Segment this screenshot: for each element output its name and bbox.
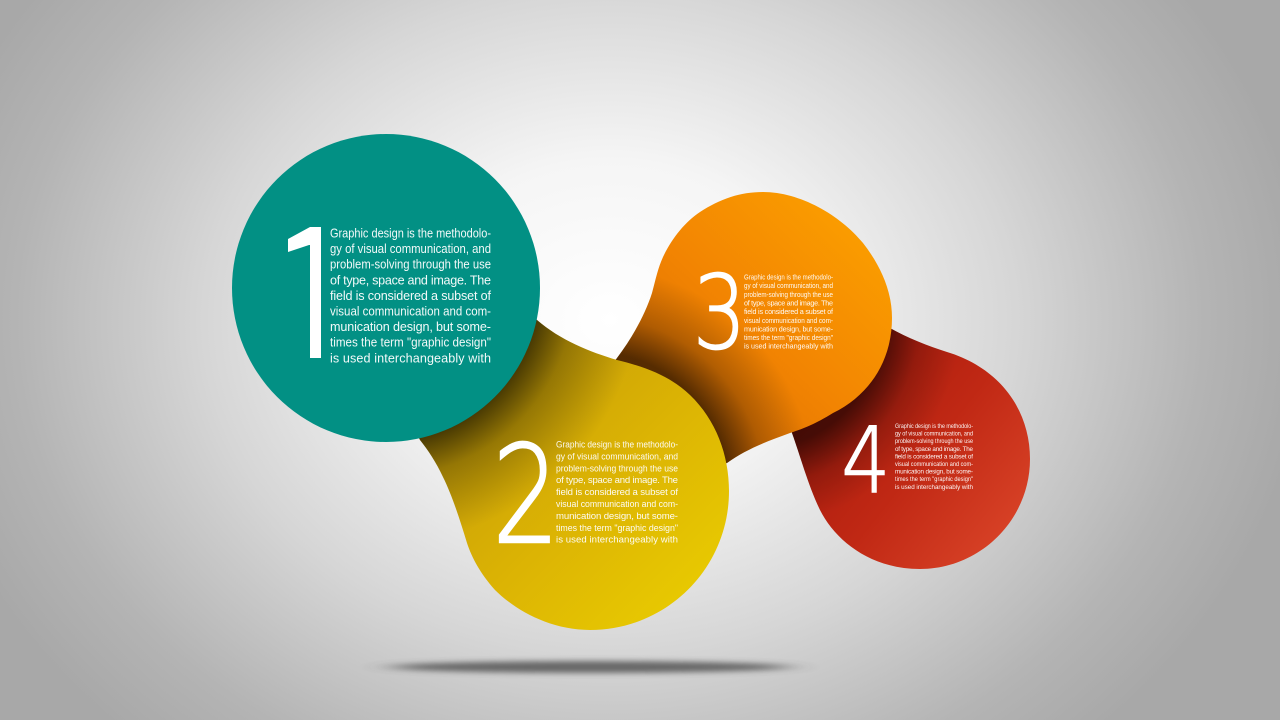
text block 1 (330, 226, 492, 365)
text block 3: Graphic design is the methodolo- (744, 272, 834, 282)
text block 4: gy of visual communication, and (895, 431, 973, 438)
text block 3: is used interchangeably with (744, 342, 833, 351)
text block 4 (895, 423, 973, 491)
panel: step 2 yellow (400, 300, 729, 630)
text block 2: munication design, but some- (556, 511, 678, 522)
text block 3: visual communication and com- (744, 316, 834, 325)
panel: step 4 red (780, 322, 1030, 569)
text block 4: visual communication and com- (895, 461, 973, 468)
number 3: 3 (693, 253, 746, 372)
text block 4: times the term "graphic design" (895, 476, 973, 483)
text block 2: of type, space and image. The (556, 475, 678, 486)
text block 1: is used interchangeably with (330, 351, 491, 365)
text block 3: problem-solving through the use (744, 290, 833, 299)
text block 1: gy of visual communication, and (330, 242, 491, 256)
text block 4: field is considered a subset of (895, 453, 973, 460)
text block 2: Graphic design is the methodolo- (556, 440, 678, 450)
text block 2: problem-solving through the use (556, 463, 678, 474)
text block 3: times the term "graphic design" (744, 333, 833, 342)
text block 3: of type, space and image. The (744, 298, 833, 308)
text block 1: munication design, but some- (330, 320, 491, 334)
text block 2: gy of visual communication, and (556, 451, 678, 462)
text block 4: problem-solving through the use (895, 438, 973, 445)
text block 1: visual communication and com- (330, 304, 491, 318)
floor shadow (390, 661, 790, 673)
number 2: 2 (492, 417, 559, 574)
text block 3: munication design, but some- (744, 324, 834, 333)
text block 2: field is considered a subset of (556, 487, 678, 498)
text block 1: times the term "graphic design" (330, 336, 491, 350)
text block 2: visual communication and com- (556, 499, 678, 510)
number 1 (288, 227, 321, 358)
text block 2: times the term "graphic design" (556, 523, 678, 534)
text block 4: Graphic design is the methodolo- (895, 423, 973, 430)
panel: step 3 orange (600, 192, 892, 480)
text block 1: of type, space and image. The (330, 273, 491, 287)
text block 4: munication design, but some- (895, 469, 973, 476)
text block 4: is used interchangeably with (895, 484, 973, 491)
text block 3: gy of visual communication, and (744, 281, 833, 290)
text block 3 (744, 272, 834, 351)
text block 1: Graphic design is the methodolo- (330, 226, 491, 240)
text block 1: field is considered a subset of (330, 289, 492, 303)
text block 3: field is considered a subset of (744, 307, 833, 316)
text block 4: of type, space and image. The (895, 446, 973, 453)
number 4: 4 (842, 408, 890, 514)
text block 2: is used interchangeably with (556, 535, 678, 546)
text block 2 (556, 440, 678, 546)
number 1: 1 (255, 192, 370, 401)
panel: step 1 teal (232, 134, 540, 442)
text block 1: problem-solving through the use (330, 258, 491, 272)
